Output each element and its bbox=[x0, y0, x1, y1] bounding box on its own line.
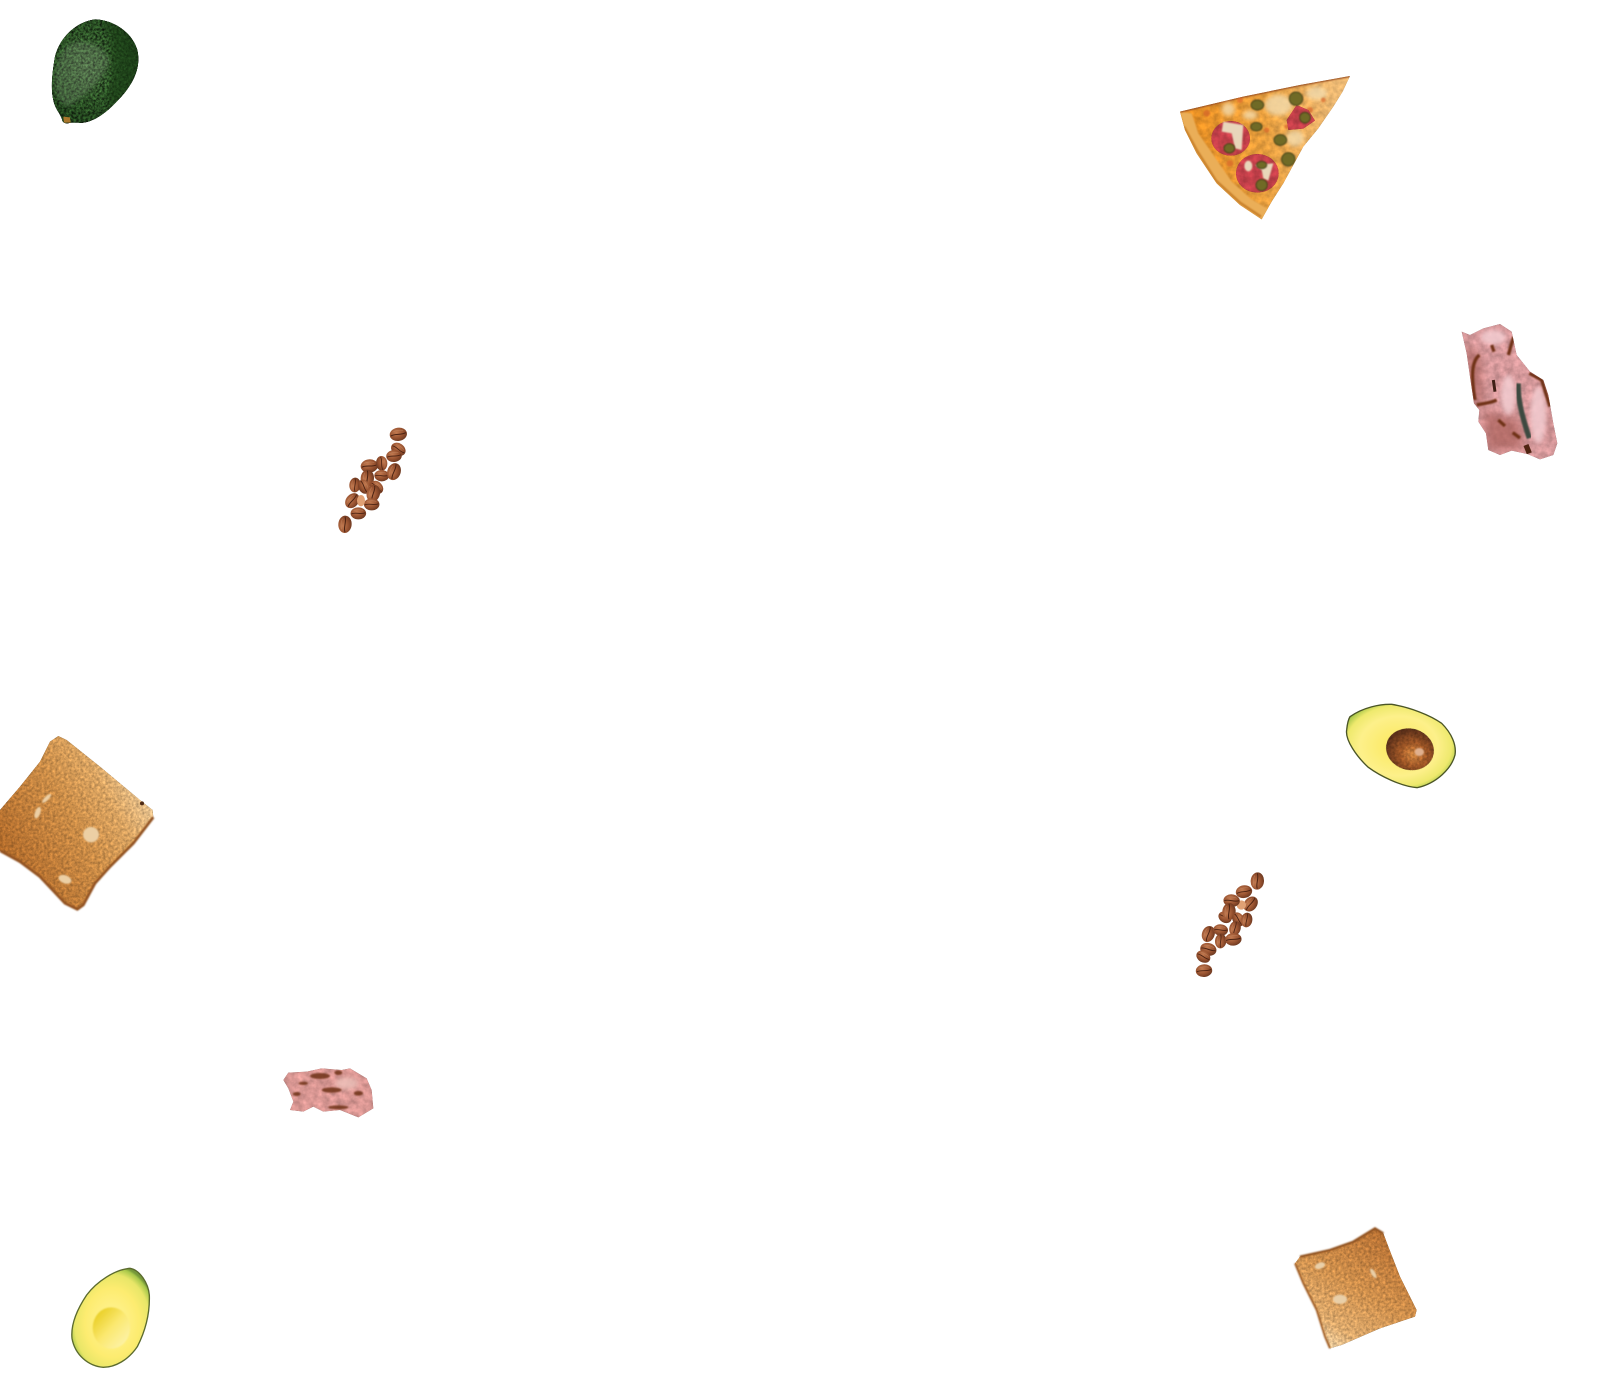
avocado pit hollow bbox=[93, 1307, 130, 1349]
bacon shaded areas bbox=[1465, 344, 1526, 454]
bacon highlights bbox=[1481, 330, 1546, 443]
pizza slice, top right bbox=[1180, 76, 1350, 219]
cut avocado without pit, bottom left bbox=[72, 1268, 149, 1367]
toast holes bbox=[1314, 1261, 1378, 1304]
orange sauce specks bbox=[1203, 97, 1326, 167]
bacon dark streaks bbox=[1473, 337, 1550, 438]
bacon strip, right bbox=[1462, 324, 1557, 459]
coffee beans, lower right bbox=[1194, 872, 1265, 978]
cut avocado with pit, right bbox=[1347, 704, 1455, 788]
whole dark avocado, top left bbox=[52, 19, 138, 123]
coffee beans, upper left bbox=[338, 427, 408, 534]
cheese patches bbox=[1222, 87, 1327, 146]
bacon piece, lower left bbox=[283, 1068, 373, 1117]
avocado pit bbox=[1381, 723, 1439, 775]
salami slices bbox=[1211, 105, 1315, 193]
bacon char marks bbox=[293, 1070, 363, 1109]
toast slice, left bbox=[0, 736, 153, 909]
toast slice, bottom right bbox=[1295, 1228, 1417, 1348]
olives bbox=[1224, 92, 1310, 191]
pizza crust bbox=[1180, 112, 1268, 219]
toast holes bbox=[33, 793, 99, 885]
cheese over salami bbox=[1222, 122, 1273, 181]
